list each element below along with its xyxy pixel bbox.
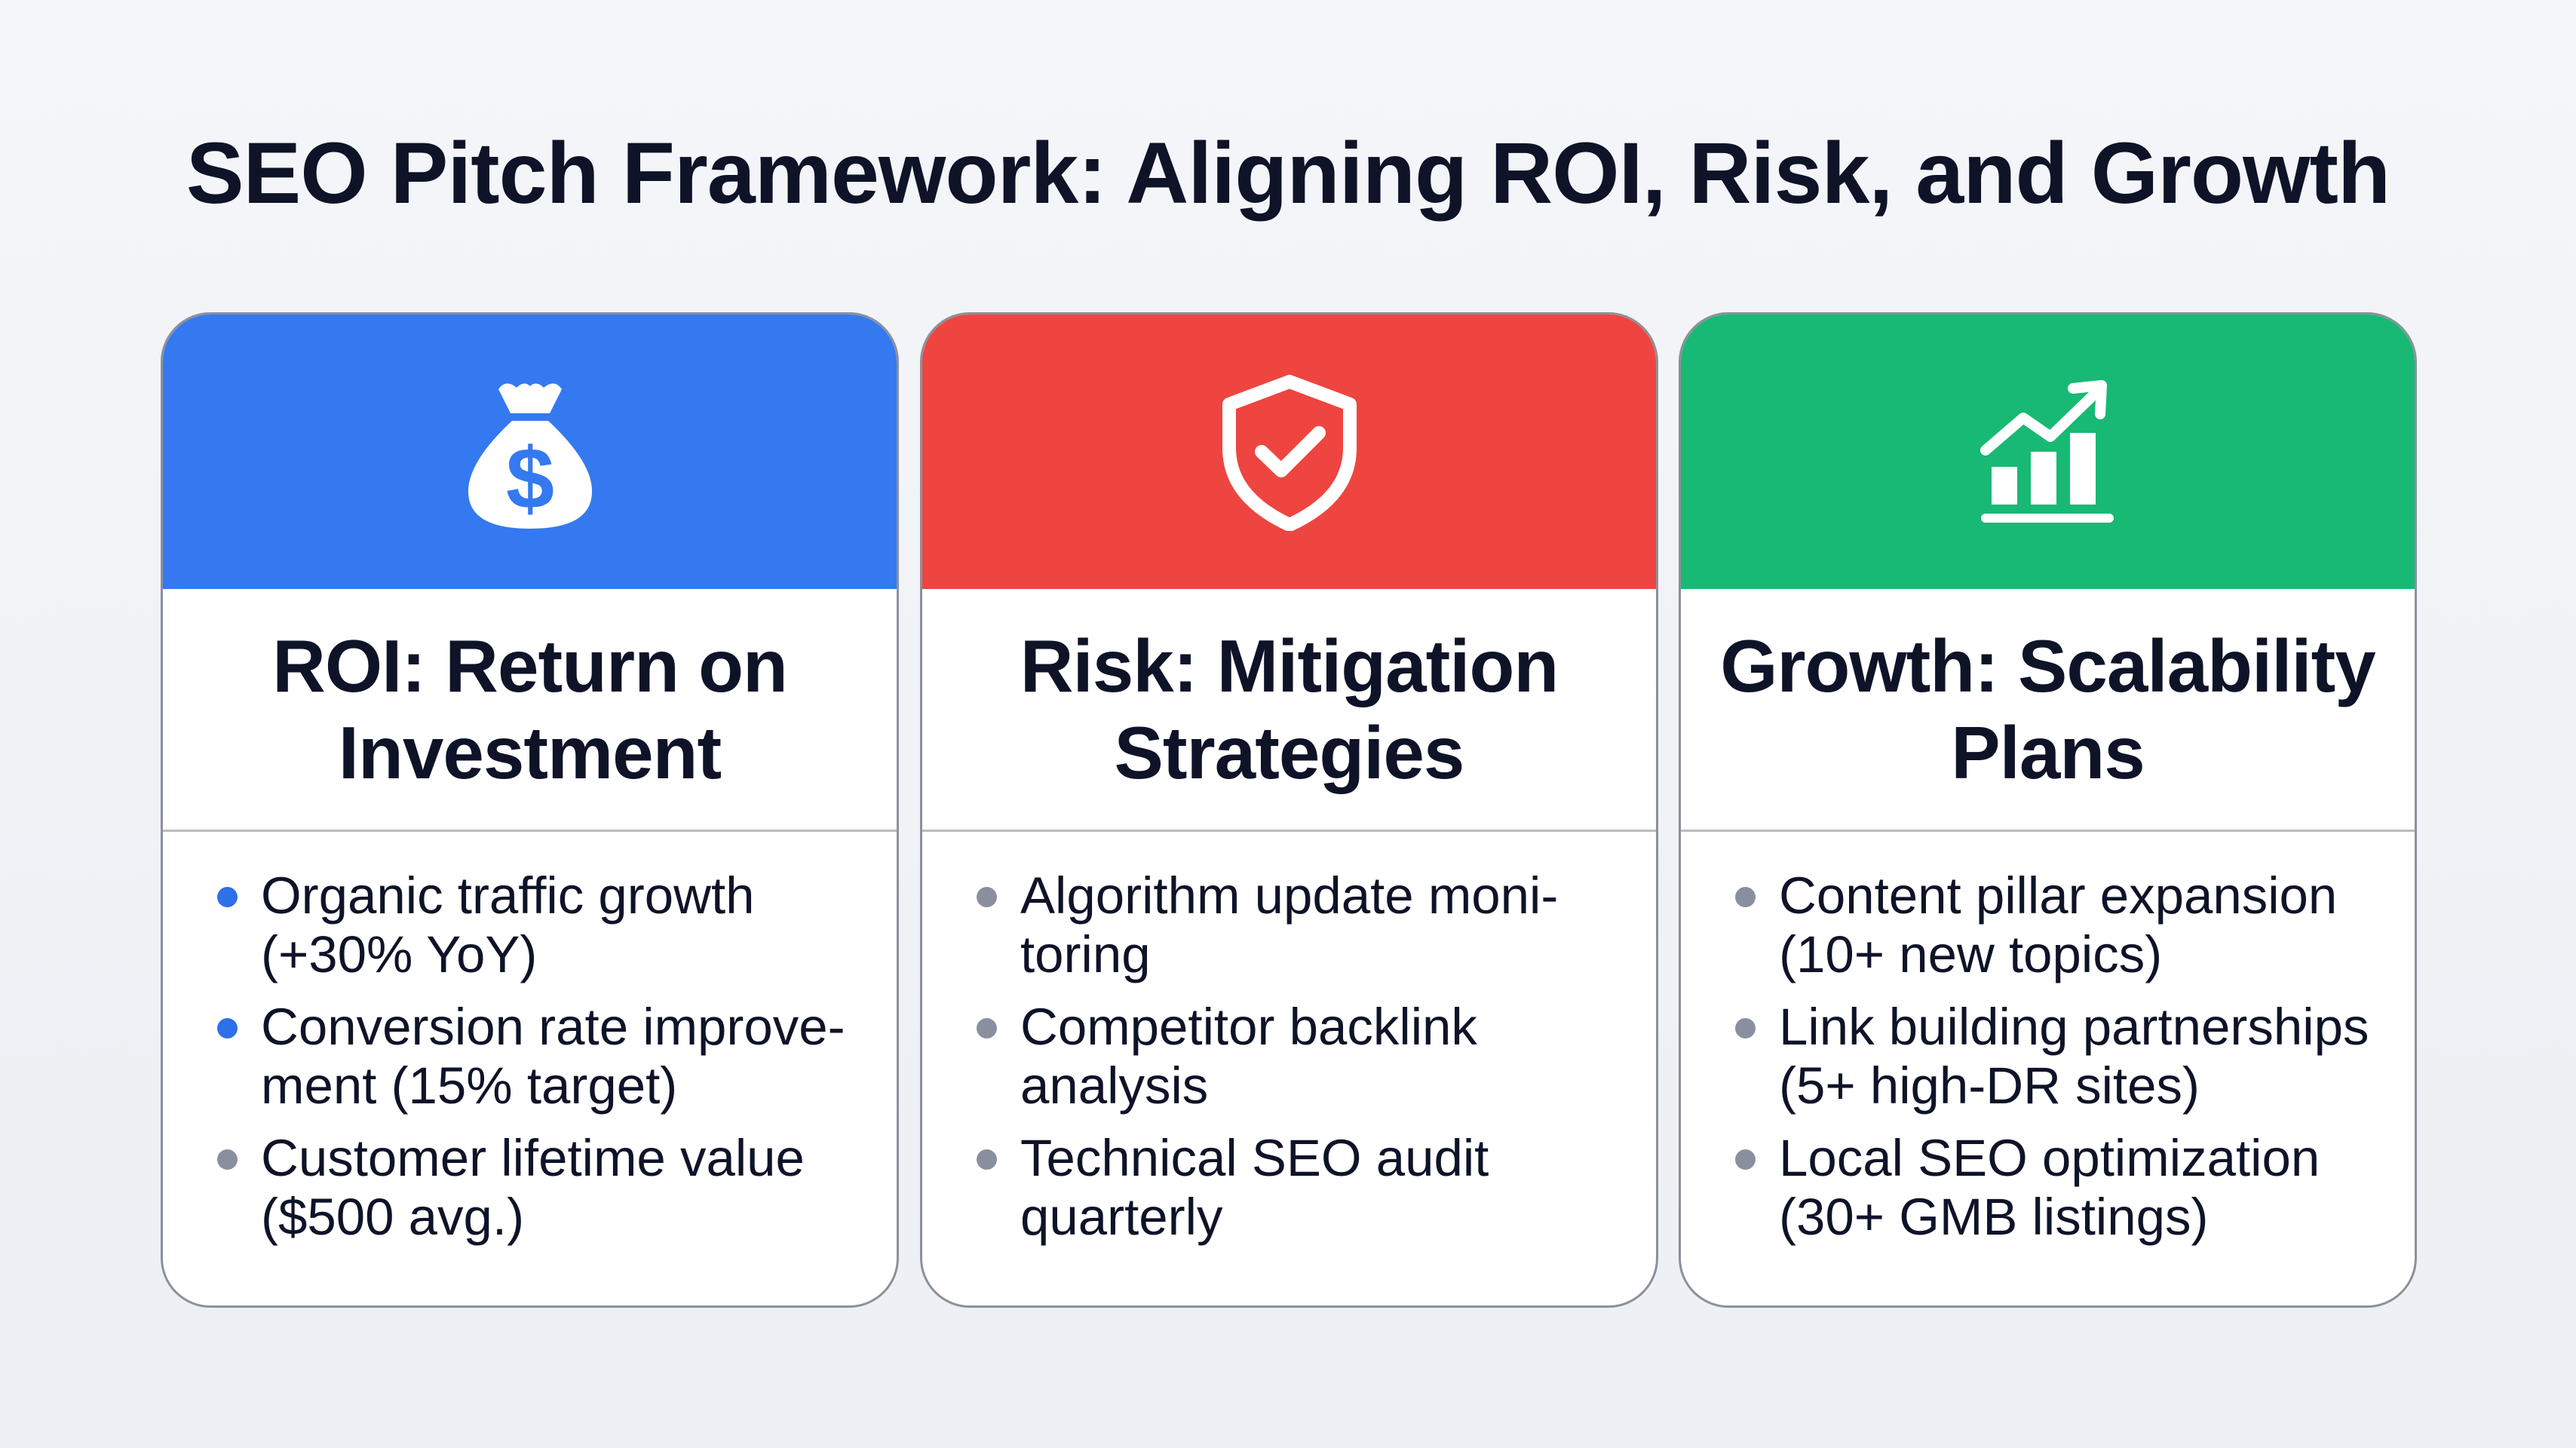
- panel: Growth: [1679, 312, 2417, 1308]
- bullet list: analysis: [1020, 1057, 1208, 1115]
- bullet list: [217, 867, 845, 1246]
- heading: Plans: [1951, 710, 2145, 793]
- heading: ROI: Return on: [272, 624, 787, 707]
- bullet list: Conversion rate improve-: [261, 998, 845, 1056]
- heading: [1681, 589, 2415, 832]
- bullet list: Competitor backlink: [1020, 998, 1477, 1056]
- header: green with chart icon: [1681, 314, 2415, 589]
- bullet list: (10+ new topics): [1779, 925, 2162, 983]
- heading: Strategies: [1115, 710, 1464, 793]
- heading: Growth: Scalability: [1720, 624, 2375, 707]
- bullet list: toring: [1020, 925, 1151, 983]
- header: ROI blue with money bag icon: $: [506, 431, 554, 527]
- bullet list: Local SEO optimization: [1779, 1129, 2320, 1187]
- bullet list: Link building partnerships: [1779, 998, 2369, 1056]
- bullet list: Technical SEO audit: [1020, 1129, 1489, 1187]
- panel: Risk: [920, 312, 1658, 1308]
- heading: Risk: Mitigation: [1020, 624, 1558, 707]
- bullet list: [977, 867, 1558, 1246]
- bullet list: ment (15% target): [261, 1057, 677, 1115]
- bullet list: quarterly: [1020, 1188, 1222, 1246]
- header: ROI blue with money bag icon: [163, 314, 897, 589]
- bullet list: [1735, 867, 2369, 1246]
- heading: [163, 589, 897, 832]
- heading: [922, 589, 1656, 832]
- bullet list: Organic traffic growth: [261, 867, 754, 925]
- bullet list: (30+ GMB listings): [1779, 1188, 2208, 1246]
- title: SEO Pitch Framework: Aligning ROI, Risk, and Growth: [186, 125, 2390, 222]
- bullet list: ($500 avg.): [261, 1188, 524, 1246]
- heading: Investment: [339, 710, 721, 793]
- header: red with shield icon: [922, 314, 1656, 589]
- bullet list: (+30% YoY): [261, 925, 537, 983]
- bullet list: Customer lifetime value: [261, 1129, 805, 1187]
- panel: ROI: [161, 312, 899, 1308]
- bullet list: Content pillar expansion: [1779, 867, 2337, 925]
- bullet list: (5+ high-DR sites): [1779, 1057, 2200, 1115]
- bullet list: Algorithm update moni-: [1020, 867, 1558, 925]
